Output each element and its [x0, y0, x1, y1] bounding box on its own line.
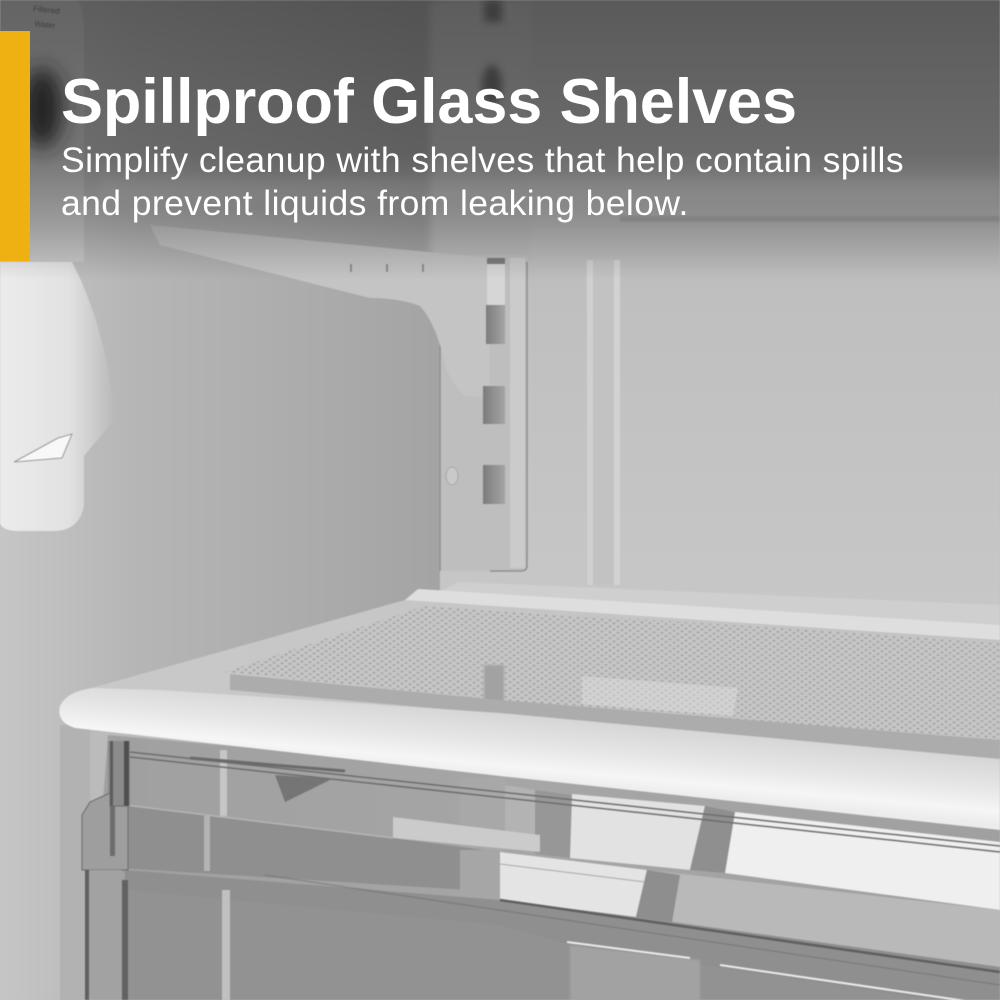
soft light band on upper shelf — [100, 178, 1000, 200]
bracket plate — [440, 255, 527, 571]
lighter reflection on glass — [582, 676, 738, 716]
bracket tick marks — [351, 264, 423, 272]
shadow under shelf on left wall — [60, 725, 90, 1000]
subtitle: and prevent liquids from leaking below. — [61, 183, 689, 223]
triangle reflection — [275, 775, 332, 802]
left wall — [0, 0, 440, 1000]
small light strips — [204, 816, 210, 871]
water filter cover — [0, 0, 114, 531]
filter body — [0, 262, 114, 531]
bright panels — [570, 794, 705, 870]
shelf back rails — [405, 582, 1000, 640]
back wall — [0, 0, 1000, 640]
box reflection — [500, 852, 647, 917]
drawer body — [88, 735, 1000, 1000]
shelf bracket — [150, 225, 527, 571]
glass inner strip — [230, 674, 1000, 760]
title: Spillproof Glass Shelves — [61, 67, 797, 137]
shelf glass surface — [88, 600, 1000, 765]
upper slot insert — [487, 258, 505, 264]
shelf front edge — [59, 688, 1000, 830]
filter label text: Filtered — [33, 4, 60, 16]
bracket arm — [150, 225, 490, 397]
lower highlight lines — [567, 942, 1000, 1000]
dark upper blobs — [482, 0, 502, 105]
rear columns — [220, 750, 227, 816]
left clip — [82, 793, 128, 870]
dark overlay behind text — [0, 0, 1000, 280]
filter door upper — [0, 0, 84, 262]
bracket rail — [510, 258, 525, 568]
bracket screw — [446, 467, 458, 485]
dark knob behind title — [22, 68, 62, 148]
upper column behind bracket — [430, 0, 530, 260]
subtitle — [61, 140, 904, 223]
bracket plate edges — [440, 262, 527, 571]
rail lines — [130, 752, 1000, 852]
left post — [108, 741, 130, 806]
shelf textured glass — [225, 606, 1000, 742]
subtitle: Simplify cleanup with shelves that help contain spills — [61, 140, 904, 180]
mid band — [120, 804, 500, 892]
accent bar — [0, 31, 30, 261]
vertical wall rib — [586, 260, 620, 585]
filter label text: Water — [34, 19, 56, 30]
right reflection panel — [636, 870, 1000, 967]
filter handle — [14, 434, 72, 462]
bracket slots — [486, 305, 505, 344]
shelf shadow line — [620, 216, 1000, 222]
drawer details — [82, 741, 1000, 1000]
bracket reflection in glass — [484, 665, 504, 703]
lower body — [125, 870, 1000, 1000]
